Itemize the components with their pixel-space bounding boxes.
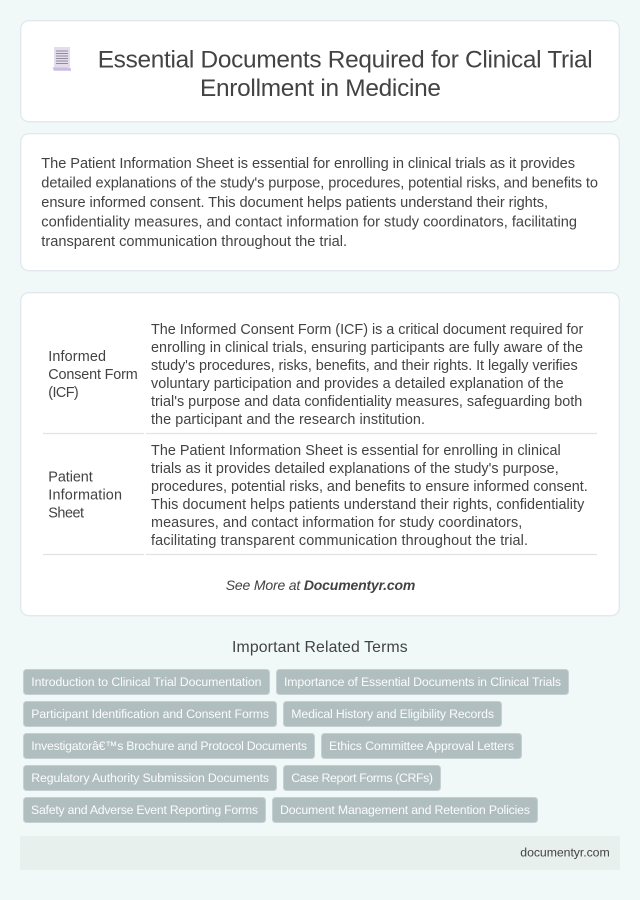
tag [24, 670, 270, 694]
panel: summary paragraph [21, 134, 619, 271]
description: patient information sheet: measures, and contact information for study coordinators, [151, 515, 522, 531]
tag [322, 734, 522, 758]
description: patient information sheet: trials as it provides detailed explanations of the study's purpose, [151, 461, 559, 477]
label: informed consent form: (ICF) [48, 385, 79, 401]
footer bar [20, 836, 620, 870]
tag [24, 766, 276, 790]
summary text: detailed explanations of the study's purpose, procedures, potential risks, and benefits to [41, 176, 598, 192]
tag [272, 798, 538, 822]
description: patient information sheet: The Patient Information Sheet is essential for enrolling in clinical [151, 443, 561, 459]
title: Enrollment in Medicine [200, 75, 441, 102]
heading: important related terms: Important Related Terms [232, 639, 408, 656]
description: informed consent form: trial's purpose and data confidentiality measures, safeguarding both [151, 394, 582, 410]
summary text: confidentiality measures, and contact information for study coordinators, facilitating [41, 214, 577, 230]
summary text [41, 156, 598, 250]
tag [284, 766, 440, 790]
tag: Regulatory Authority Submission Documents [31, 771, 269, 785]
label: informed consent form: Informed [48, 349, 106, 365]
footer text: documentyr.com [520, 846, 610, 860]
tag [24, 702, 276, 726]
summary text: ensure informed consent. This document helps patients understand their rights, [41, 195, 548, 211]
related terms tags [24, 670, 568, 822]
label: patient information sheet: Sheet [48, 506, 84, 522]
tag [24, 798, 266, 822]
summary text: The Patient Information Sheet is essential for enrolling in clinical trials as it provides [41, 156, 575, 172]
tag: Safety and Adverse Event Reporting Forms [31, 803, 258, 817]
tag: Participant Identification and Consent Forms [31, 707, 269, 721]
tag: Investigatorâ€™s Brochure and Protocol Documents [31, 739, 307, 753]
title: Essential Documents Required for Clinical Trial [98, 46, 593, 73]
description: patient information sheet: facilitating transparent communication throughout the trial. [151, 533, 528, 549]
label: informed consent form: Consent Form [48, 367, 138, 383]
tag: Document Management and Retention Policies [280, 803, 530, 817]
description: patient information sheet: procedures, potential risks, and benefits to ensure informed consent. [151, 479, 588, 495]
tag: Ethics Committee Approval Letters [329, 739, 514, 753]
description: informed consent form: The Informed Consent Form (ICF) is a critical document required for [151, 322, 584, 338]
summary text: transparent communication throughout the trial. [41, 234, 347, 250]
label: patient information sheet: Information [48, 488, 122, 504]
label: patient information sheet [48, 470, 122, 522]
row: patient information sheet [48, 443, 588, 549]
label: patient information sheet: Patient [48, 470, 93, 486]
header panel [21, 21, 619, 122]
tag: Importance of Essential Documents in Clinical Trials [284, 675, 561, 689]
description: informed consent form: enrolling in clinical trials, ensuring participants are fully aware of the [151, 340, 583, 356]
description: patient information sheet [151, 443, 588, 549]
title [98, 46, 593, 102]
tag: Case Report Forms (CRFs) [291, 771, 433, 785]
tag [284, 702, 502, 726]
label: informed consent form [48, 349, 138, 401]
tag: Medical History and Eligibility Records [291, 707, 494, 721]
row: informed consent form [48, 322, 584, 428]
tag: Introduction to Clinical Trial Documentation [31, 675, 262, 689]
description: informed consent form: study's procedures, risks, benefits, and their rights. It legally verifies [151, 358, 578, 374]
description: informed consent form: the participant and the research institution. [151, 412, 425, 428]
tag [24, 734, 314, 758]
icon: document scroll [52, 47, 71, 71]
panel: documents table [21, 293, 619, 616]
tag [276, 670, 568, 694]
see more link: See More at Documentyr.com [226, 577, 415, 593]
description: informed consent form [151, 322, 584, 428]
description: patient information sheet: This document helps patients understand their rights, confidentiality [151, 497, 585, 513]
description: informed consent form: voluntary participation and provides a detailed explanation of the [151, 376, 564, 392]
